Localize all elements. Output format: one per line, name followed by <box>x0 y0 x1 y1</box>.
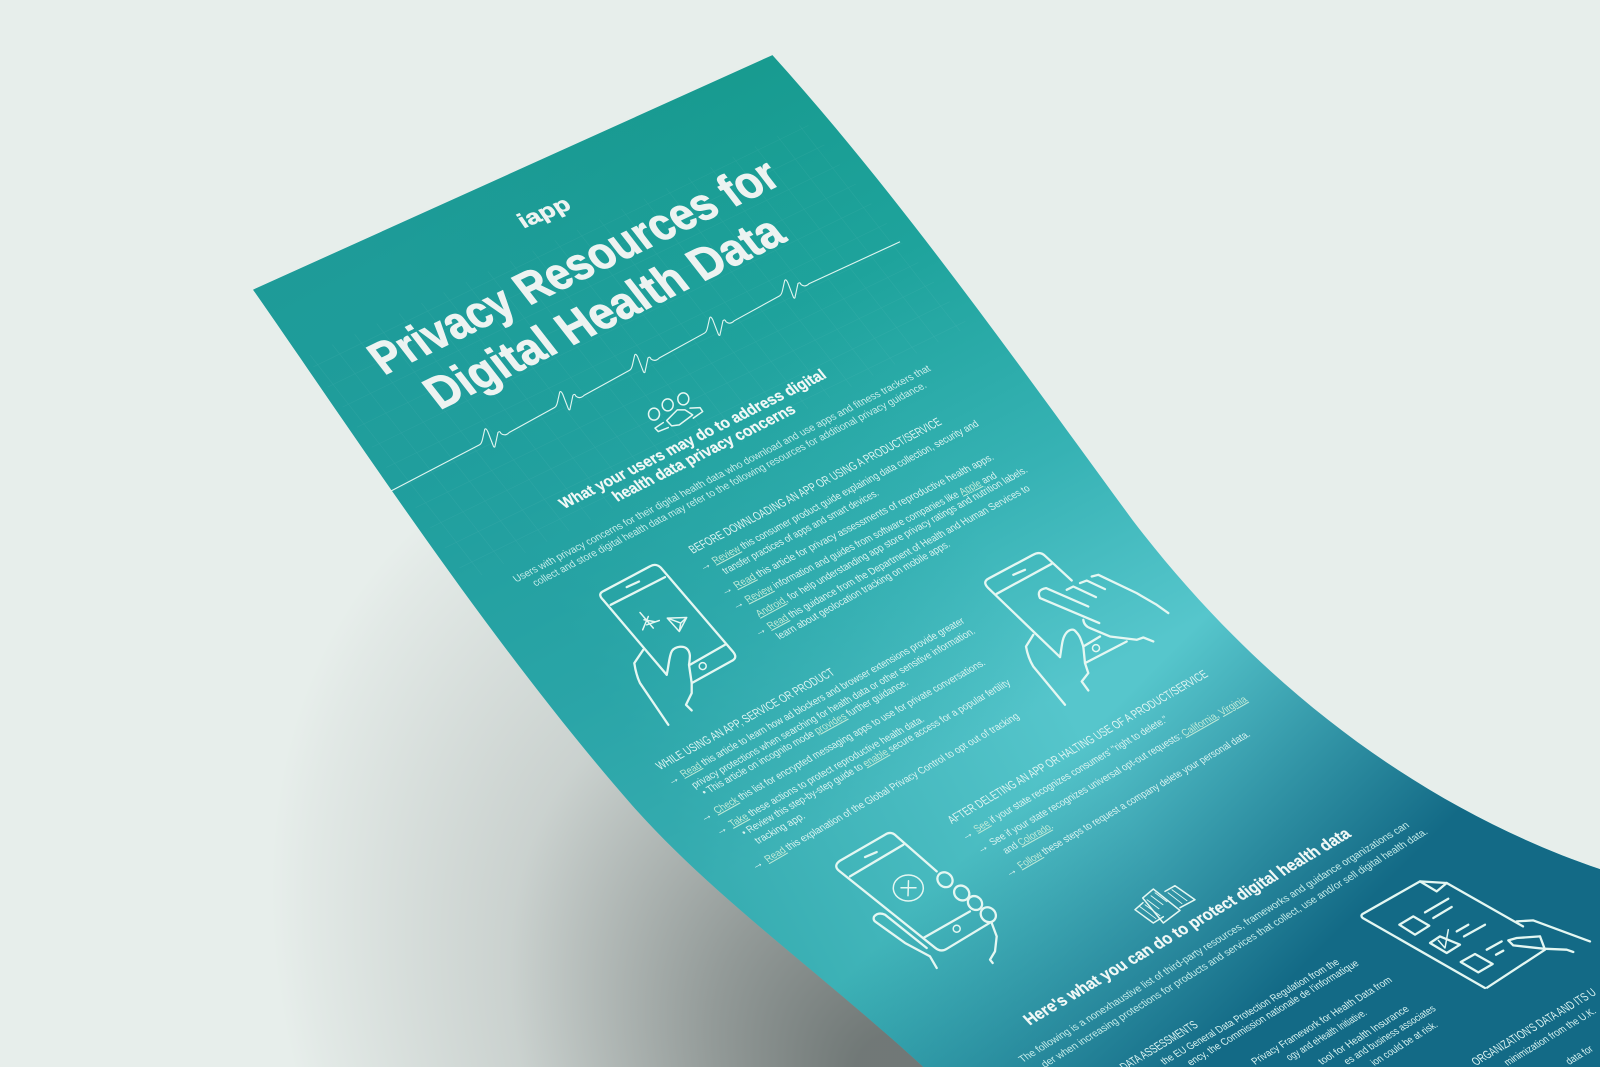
resource list: → <box>698 558 713 574</box>
resource list: See if your state recognizes consumers' "right to delete." <box>971 714 1171 835</box>
icon: phone with delete symbol <box>836 833 999 968</box>
resource list: • Review this step-by-step guide to enable secure access for a popular fertility <box>739 677 1014 838</box>
resource list: → <box>699 809 714 825</box>
resource list: Take these actions to protect reproductive health data. <box>726 714 927 830</box>
resource list: → <box>666 772 682 788</box>
heading: what your users may do: health data privacy concerns <box>609 402 800 505</box>
resource text: tool for Health Insurance <box>1316 1003 1412 1067</box>
icon: buildings <box>1135 886 1195 923</box>
section: while using <box>653 615 1022 873</box>
resource list <box>666 615 1022 873</box>
icon: people <box>648 393 703 432</box>
section: data assessments <box>1117 957 1441 1067</box>
resource list: → <box>975 840 991 856</box>
resource list: • This article on incognito mode provides further guidance. <box>699 677 911 798</box>
heading: what your users may do: What your users may do to address digital <box>556 367 830 512</box>
title: Digital Health Data <box>414 207 795 419</box>
resource list: transfer practices of apps and smart devices. <box>720 488 882 577</box>
logo: iapp: iapp <box>512 192 575 233</box>
resource list: Check this list for encrypted messaging apps to use for private conversations. <box>711 657 988 816</box>
resource list: Follow these steps to request a company delete your personal data. <box>1015 729 1253 871</box>
section: organization's data <box>1468 986 1599 1067</box>
resource list: See if your state recognizes universal opt-out requests: California, Virginia <box>987 694 1250 848</box>
resource list <box>698 418 1033 642</box>
intro paragraph: der when increasing protections for products and services that collect, use and/or sell digital health data. <box>1039 826 1431 1067</box>
icon: checklist document with hand <box>1361 881 1590 988</box>
resource list: Read this article to learn how ad blockers and browser extensions provide greater <box>678 615 968 780</box>
section heading: WHILE USING AN APP, SERVICE OR PRODUCT <box>653 666 838 772</box>
resource text: ion could be at risk. <box>1368 1019 1441 1067</box>
resource text <box>1158 957 1441 1067</box>
resource list: → <box>960 827 976 843</box>
resource list: Read this article for privacy assessments of reproductive health apps. <box>731 452 997 591</box>
section heading: AFTER DELETING AN APP OR HALTING USE OF A PRODUCT/SERVICE <box>945 668 1211 826</box>
resource text: the EU General Data Protection Regulation from the <box>1158 957 1342 1067</box>
resource list: → <box>719 583 735 598</box>
resource list: Read this guidance from the Department of Health and Human Services to <box>765 483 1033 632</box>
resource list: Review information and guides from software companies like Apple and <box>742 470 1000 605</box>
resource list: learn about geolocation tracking on mobile apps. <box>774 539 953 642</box>
resource text: es and business associates <box>1341 1003 1439 1067</box>
resource list: privacy protections when searching for health data or other sensitive information. <box>689 626 978 791</box>
resource list: → <box>750 857 765 873</box>
resource list: → <box>714 822 730 838</box>
paper sheet <box>253 55 1600 1067</box>
intro paragraph: Users with privacy concerns for their digital health data who download and use apps and fitness trackers that <box>511 363 933 585</box>
resource list: → <box>1004 864 1019 880</box>
resource list: tracking app. <box>752 811 808 846</box>
resource list: and Colorado. <box>1000 821 1056 856</box>
icon: phone with app store logos <box>600 565 735 725</box>
resource list: Read this explanation of the Global Privacy Control to opt out of tracking <box>762 711 1022 865</box>
intro paragraph: collect and store digital health data may refer to the following resources for additional privacy guidance. <box>530 380 929 589</box>
resource text: Privacy Framework for Health Data from <box>1249 975 1395 1067</box>
resource text: ogy and eHealth Initiative. <box>1284 1007 1370 1063</box>
heading: here's what you can do: Here's what you can do to protect digital health data <box>1019 824 1355 1029</box>
heartbeat line <box>390 242 900 492</box>
section intro: users <box>511 363 933 589</box>
section: after deleting <box>945 668 1253 880</box>
section: what you can do <box>1016 820 1431 1067</box>
resource text: ency, the Commission nationale de l'informatique <box>1185 958 1362 1067</box>
resource list: Android, for help understanding app store privacy ratings and nutrition labels. <box>753 465 1030 619</box>
intro paragraph: The following is a nonexhaustive list of third-party resources, frameworks and guidance organizations can <box>1016 820 1412 1065</box>
title: Privacy Resources for <box>358 150 790 384</box>
resource list: → <box>753 623 768 639</box>
icon: phone tapped by finger <box>985 553 1168 705</box>
resource list: → <box>731 597 746 613</box>
resource list: Review this consumer product guide explaining data collection, security and <box>709 418 982 566</box>
section: before downloading <box>686 415 1033 642</box>
section heading: BEFORE DOWNLOADING AN APP OR USING A PRODUCT/SERVICE <box>686 415 945 556</box>
